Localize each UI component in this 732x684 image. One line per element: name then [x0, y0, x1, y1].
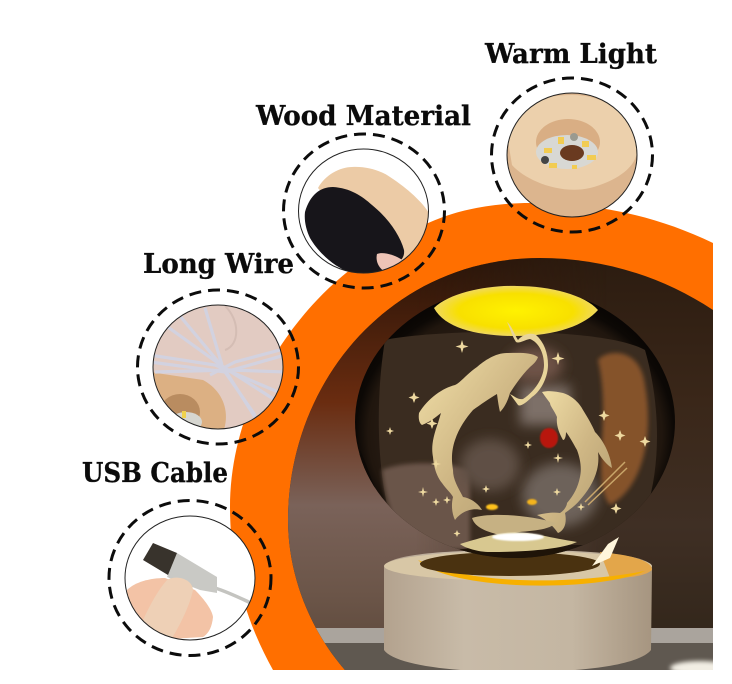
orange arc background [230, 203, 713, 670]
wooden lamp base [384, 550, 652, 672]
crystal ball [355, 286, 675, 574]
feature: wood material [255, 101, 471, 288]
refraction highlights [358, 332, 657, 574]
top yellow glow [434, 286, 598, 336]
dashed ring [109, 500, 271, 656]
ribbon heart [507, 322, 548, 406]
dashed ring [284, 134, 444, 288]
engraved wave base [460, 515, 577, 552]
shooting star streak [585, 462, 627, 505]
thin outline [125, 516, 255, 640]
product photo panel [288, 258, 730, 675]
glass light streak [592, 537, 619, 566]
photo: coiled white wire [150, 305, 285, 435]
dashed ring [138, 290, 298, 444]
photo: wooden base with LEDs [507, 93, 637, 217]
heading: warm light: Warm Light [484, 39, 658, 70]
feature: usb cable [82, 458, 271, 656]
dolphin: left [419, 353, 538, 520]
feature: long wire [138, 249, 298, 444]
thin outline [298, 149, 428, 273]
dolphin: right [537, 391, 612, 533]
infographic: crystal ball lamp features [82, 42, 713, 670]
heading: long wire: Long Wire [143, 249, 294, 280]
thin outline [153, 305, 283, 429]
dashed ring [492, 78, 652, 232]
heading: usb cable: USB Cable [82, 458, 228, 489]
photo: hand holding usb plug [127, 530, 254, 638]
engraved stars [386, 340, 650, 537]
heading: wood material: Wood Material [255, 101, 471, 132]
feature: warm light [484, 39, 658, 232]
thin outline [507, 93, 637, 217]
photo: felt underside of base [304, 166, 428, 272]
table surface [316, 628, 713, 670]
